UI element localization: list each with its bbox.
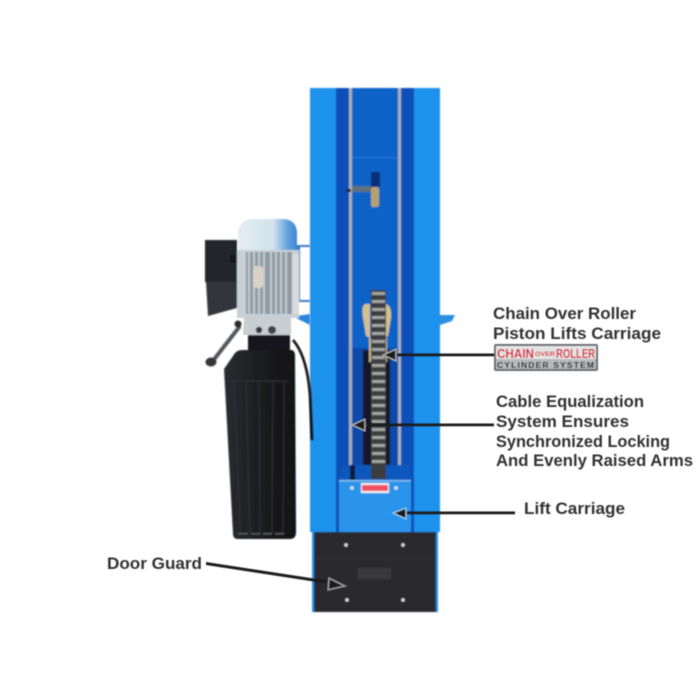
label: cable equalization — [496, 393, 693, 470]
door guard — [314, 532, 436, 612]
badge: chain over roller cylinder system — [494, 344, 598, 371]
hydraulic power unit — [205, 219, 312, 539]
handle lever — [212, 326, 240, 362]
chain — [371, 290, 386, 478]
label: chain over roller — [493, 305, 661, 343]
label: chain over roller: Chain Over Roller — [493, 305, 637, 323]
label: chain over roller: Piston Lifts Carriage — [493, 325, 661, 343]
badge: chain over roller cylinder system: ROLLER — [556, 347, 595, 361]
cable sensor — [346, 172, 380, 207]
label: cable equalization: Synchronized Locking — [496, 433, 670, 451]
badge: chain over roller cylinder system: CYLINDER SYSTEM — [497, 360, 594, 370]
lift carriage — [339, 465, 411, 533]
oil tank — [224, 350, 296, 539]
badge: chain over roller cylinder system: CHAIN — [497, 347, 534, 361]
chain roller bracket — [362, 304, 391, 338]
hydraulic hose — [293, 340, 312, 440]
label: lift carriage: Lift Carriage — [524, 500, 625, 518]
right side bracket — [440, 315, 455, 325]
arrow: lift carriage — [393, 508, 515, 519]
chain shadow channel — [363, 350, 390, 468]
label: cable equalization: System Ensures — [496, 413, 629, 431]
motor — [237, 219, 299, 318]
control box — [205, 240, 238, 316]
arrow: chain over roller — [383, 349, 497, 361]
label: cable equalization: And Evenly Raised Arms — [496, 452, 693, 470]
label: cable equalization: Cable Equalization — [496, 393, 644, 411]
label: door guard: Door Guard — [107, 555, 202, 573]
lift column — [310, 88, 455, 612]
mount brackets — [296, 245, 310, 302]
pump base — [243, 317, 291, 351]
badge: chain over roller cylinder system: OVER — [535, 351, 555, 358]
arrow: door guard — [206, 562, 345, 590]
arrow: cable equalization — [352, 419, 494, 431]
